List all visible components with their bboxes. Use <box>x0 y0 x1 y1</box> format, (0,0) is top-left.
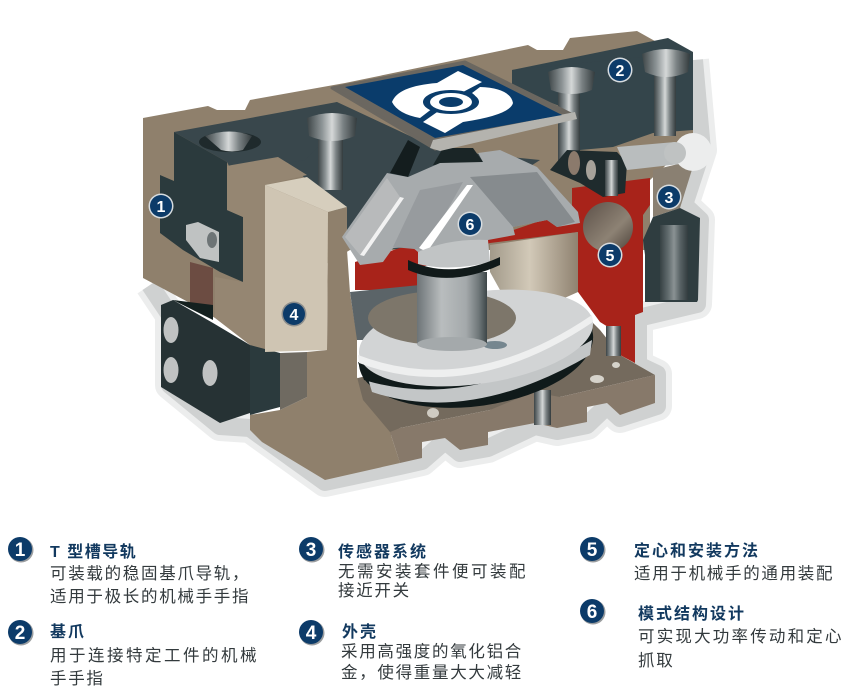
red section <box>355 178 650 363</box>
marker 5 <box>598 242 622 268</box>
legend item 5: 5 <box>587 540 598 561</box>
legend item 1 <box>8 537 250 606</box>
legend item 6 <box>580 599 844 670</box>
legend item 4: 外壳 <box>342 622 378 641</box>
beige jaw block <box>265 177 347 352</box>
sensor hole <box>583 202 633 252</box>
plate support struts <box>390 140 483 177</box>
marker 6 <box>458 212 482 236</box>
legend item 2 <box>8 620 259 688</box>
tan sensor strip <box>653 160 695 217</box>
legend item 6: 6 <box>587 602 597 623</box>
housing: tan front face <box>215 157 307 352</box>
legend item 3: 传感器系统 <box>338 542 428 561</box>
logo <box>392 71 513 133</box>
piston disc lower <box>351 276 601 422</box>
legend item 5: 适用于机械手的通用装配 <box>634 564 834 583</box>
marker 6: 6 <box>466 217 475 234</box>
legend item 4 <box>299 620 523 682</box>
legend item 1: 1 <box>15 540 26 561</box>
legend item 2: 2 <box>15 623 25 644</box>
marker 3: 3 <box>665 190 674 207</box>
base plate top and front <box>350 320 655 463</box>
legend item 4: 金，使得重量大大减轻 <box>341 663 523 682</box>
legend item 2: 手手指 <box>50 669 105 688</box>
legend item 3: 接近开关 <box>338 581 411 600</box>
marker 1: 1 <box>157 199 166 216</box>
legend item 2: 基爪 <box>50 623 86 641</box>
marker 2 <box>608 58 632 82</box>
legend item 5: 定心和安装方法 <box>634 541 760 560</box>
top cover plate <box>332 62 577 151</box>
marker 2: 2 <box>616 63 625 80</box>
legend item 2: 用于连接特定工件的机械 <box>50 646 259 665</box>
counterbore and screw in left block <box>199 132 261 152</box>
marker 4: 4 <box>290 307 299 324</box>
marker 3 <box>656 184 682 210</box>
marker 4 <box>282 302 306 326</box>
left bolt <box>307 113 357 190</box>
legend item 3: 3 <box>306 540 316 561</box>
legend item 4: 4 <box>306 623 317 644</box>
marker 1 <box>148 194 174 218</box>
pin behind red section <box>606 326 621 356</box>
legend item 6: 抓取 <box>638 651 674 670</box>
legend item 5 <box>580 537 834 583</box>
dowel pin in base <box>534 390 551 425</box>
right housing tan wall <box>250 207 400 480</box>
left guide block <box>160 102 346 282</box>
legend item 1: 适用于极长的机械手手指 <box>50 587 250 606</box>
legend item 6: 模式结构设计 <box>638 605 746 623</box>
lower right dark bar <box>643 208 700 302</box>
drop shadow of gripper <box>150 60 702 482</box>
base holes <box>427 362 620 418</box>
legend item 6: 可实现大功率传动和定心 <box>638 627 844 646</box>
legend item 1: T 型槽导轨 <box>50 542 137 561</box>
left lower jaw <box>161 300 307 423</box>
interior gray wall under red <box>350 285 420 340</box>
legend item 1: 可装载的稳固基爪导轨， <box>50 564 250 583</box>
T-slot clamp <box>186 222 219 305</box>
marker 5: 5 <box>606 248 615 265</box>
legend item 3: 无需安装套件便可装配 <box>338 562 528 581</box>
piston cylinder <box>408 240 500 351</box>
wedge hook <box>342 150 580 265</box>
beige liner behind cylinder <box>490 232 578 300</box>
right guide block <box>512 38 693 150</box>
legend item 4: 采用高强度的氧化铝合 <box>341 642 523 661</box>
interior dark back wall <box>250 102 540 250</box>
gripper illustration <box>143 31 712 480</box>
right bolts <box>548 49 690 170</box>
legend item 3 <box>299 537 528 600</box>
sensor body <box>550 133 712 197</box>
housing: rear wall <box>143 31 693 318</box>
